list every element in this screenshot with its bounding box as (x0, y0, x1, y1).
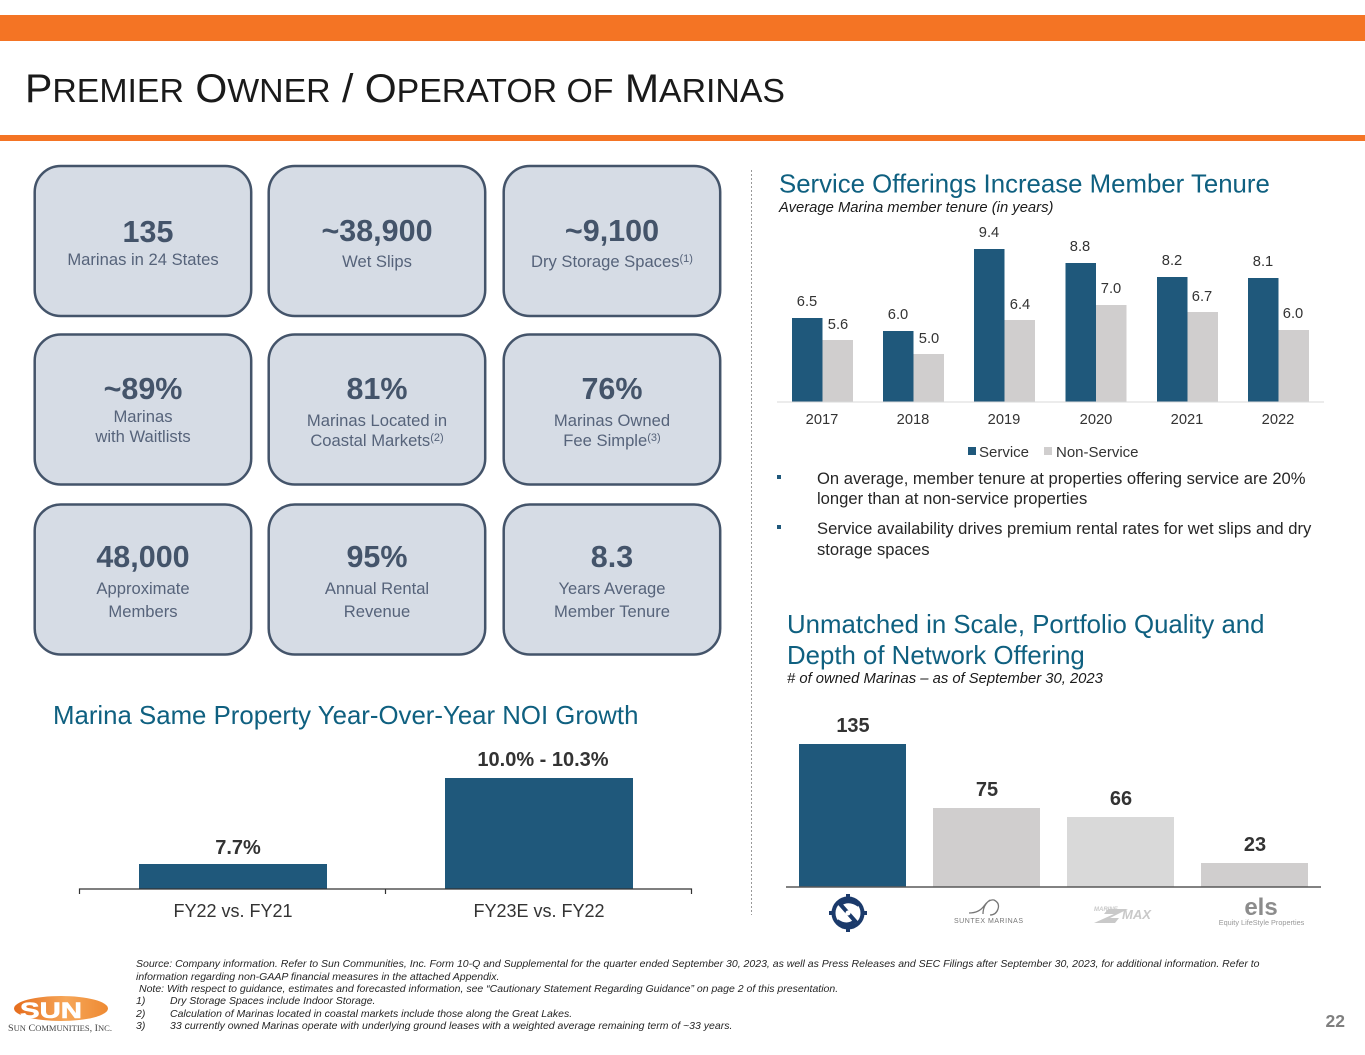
bullet list: storage spaces (817, 540, 930, 559)
heading: unmatched in scale: Depth of Network Offering (787, 642, 1085, 670)
heading: unmatched in scale (787, 611, 1264, 670)
card: fee simple: Marinas Owned (554, 411, 670, 430)
top orange banner (0, 15, 1365, 41)
bullet list: On average, member tenure at properties offering service are 20% (817, 469, 1306, 488)
footnotes: Dry Storage Spaces include Indoor Storage. (170, 995, 375, 1007)
bullet list (777, 469, 1312, 559)
logo: Equity LifeStyle Properties: els (1244, 894, 1278, 921)
bar chart: member tenure: 2020 (1080, 412, 1112, 428)
card: coastal: Marinas Located in (307, 411, 447, 430)
footnotes: 3) (136, 1020, 145, 1032)
card: members: Approximate (96, 579, 190, 598)
card: rental revenue: Annual Rental (325, 579, 429, 598)
bar chart: NOI growth (80, 749, 692, 921)
card: dry storage: (1) (680, 253, 693, 265)
card: rental revenue (269, 504, 485, 654)
title: PREMIER OWNER / OPERATOR OF MARINAS (25, 67, 785, 111)
bar chart: member tenure: 5.6 (828, 317, 848, 333)
bar chart: owned marinas: 75 (976, 779, 998, 801)
bar chart: member tenure: 2018 (897, 412, 929, 428)
bar chart: member tenure: 6.7 (1192, 289, 1212, 305)
bar chart: member tenure: 2019 (988, 412, 1020, 428)
footnotes: Note: With respect to guidance, estimates and forecasted information, see “Cautionary Statement Regarding Guidance” on page 2 of this presentation. (139, 983, 838, 995)
card: tenure: 8.3 (591, 540, 633, 574)
bar chart: member tenure: 6.0 (888, 307, 908, 323)
logo: Equity LifeStyle Properties: Equity LifeStyle Properties (1219, 918, 1305, 927)
card: rental revenue: Revenue (344, 602, 410, 621)
logo: MarineMax: MARINE (1094, 907, 1119, 913)
logo: Equity LifeStyle Properties (1219, 894, 1305, 927)
logo: Sun Communities: SUN COMMUNITIES , INC. (8, 1024, 112, 1034)
card: marinas (35, 166, 251, 316)
footnotes: 1) (136, 995, 145, 1007)
icon: Safe Harbor logo (829, 894, 867, 932)
bar chart: member tenure: 2022 (1262, 412, 1294, 428)
footnotes: Calculation of Marinas located in coastal markets include those along the Great Lakes. (170, 1008, 572, 1020)
heading: service offerings: Service Offerings Increase Member Tenure (779, 170, 1270, 198)
bullet list: longer than at non-service properties (817, 489, 1087, 508)
subheading: owned marinas: # of owned Marinas – as of September 30, 2023 (787, 671, 1104, 687)
card: tenure (504, 504, 720, 654)
heading: NOI growth: Marina Same Property Year-Over-Year NOI Growth (53, 702, 638, 730)
footnotes: Source: Company information. Refer to Sun Communities, Inc. Form 10-Q and Supplemental for the quarter ended September 30, 2023, as well as Press Releases and SEC Filings after September 30, 2023, for additional information. Refer to (136, 958, 1260, 970)
card: dry storage: ~9,100 (565, 214, 659, 248)
bullet list: Service availability drives premium rental rates for wet slips and dry (817, 519, 1312, 538)
bar chart: NOI growth: 10.0% - 10.3% (477, 749, 609, 771)
bar chart: owned marinas (786, 715, 1321, 887)
bar chart: member tenure: 8.1 (1253, 254, 1273, 270)
card: waitlists: ~89% (104, 372, 182, 406)
bar chart: member tenure (777, 225, 1324, 461)
bar chart: member tenure: 5.0 (919, 331, 939, 347)
legend: Non-Service (1056, 444, 1139, 461)
legend (968, 444, 1139, 461)
bar chart: member tenure: 2017 (806, 412, 838, 428)
bar chart: member tenure: 9.4 (979, 225, 999, 241)
logo: MarineMax (1094, 907, 1152, 923)
bar chart: owned marinas: 135 (836, 715, 870, 737)
card: wet slips (269, 166, 485, 316)
card: fee simple (504, 334, 720, 484)
card: coastal (269, 334, 485, 484)
card: fee simple: 76% (581, 372, 643, 406)
card: marinas: Marinas in 24 States (67, 250, 219, 269)
legend: Service (979, 444, 1029, 461)
card: members: Members (108, 602, 178, 621)
card: rental revenue: 95% (346, 540, 408, 574)
card: wet slips: Wet Slips (342, 252, 412, 271)
card: members: 48,000 (96, 540, 190, 574)
card: coastal: 81% (346, 372, 408, 406)
card: members (35, 504, 251, 654)
card: tenure: Years Average (558, 579, 666, 598)
subheading: tenure: Average Marina member tenure (in years) (778, 200, 1053, 216)
card: dry storage (504, 166, 720, 316)
bar chart: member tenure: 2021 (1171, 412, 1203, 428)
bar chart: NOI growth: FY23E vs. FY22 (473, 901, 605, 921)
card: wet slips: ~38,900 (321, 214, 433, 248)
card: tenure: Member Tenure (554, 602, 670, 621)
bar chart: member tenure: 8.2 (1162, 253, 1182, 269)
bar chart: member tenure: 6.0 (1283, 306, 1303, 322)
card: waitlists: Marinas (113, 407, 173, 426)
footnotes: 2) (135, 1008, 145, 1020)
card: coastal: Coastal Markets (310, 431, 430, 450)
panel: stat cards (35, 166, 720, 654)
card: marinas: 135 (123, 215, 173, 249)
bar chart: member tenure: 6.4 (1010, 297, 1030, 313)
card: coastal: (2) (430, 432, 444, 444)
logo: Suntex Marinas (954, 900, 1023, 925)
bar chart: owned marinas: 23 (1244, 834, 1266, 856)
footnotes: 33 currently owned Marinas operate with underlying ground leases with a weighted average remaining term of ~33 years. (170, 1020, 732, 1032)
bar chart: member tenure: 8.8 (1070, 239, 1090, 255)
page number: 22 (1326, 1011, 1345, 1031)
footnotes (135, 958, 1260, 1032)
footnotes: information regarding non-GAAP financial measures in the attached Appendix. (136, 971, 499, 983)
bar chart: member tenure: 7.0 (1101, 281, 1121, 297)
card: dry storage: Dry Storage Spaces (531, 252, 680, 271)
card: waitlists (35, 334, 251, 484)
logo: Sun Communities (8, 996, 112, 1034)
bar chart: NOI growth: FY22 vs. FY21 (173, 901, 293, 921)
bar chart: member tenure: 6.5 (797, 294, 817, 310)
card: fee simple: Fee Simple (563, 431, 647, 450)
card: fee simple: (3) (647, 432, 661, 444)
card: waitlists: with Waitlists (94, 427, 191, 446)
bar chart: NOI growth: 7.7% (215, 837, 261, 859)
heading: unmatched in scale: Unmatched in Scale, Portfolio Quality and (787, 611, 1264, 639)
logo: MarineMax: MAX (1122, 907, 1152, 922)
title underline bar (0, 135, 1365, 141)
logo: Sun Communities: SUN (20, 998, 82, 1023)
logo: Suntex Marinas: SUNTEX MARINAS (954, 918, 1023, 925)
bar chart: owned marinas: 66 (1110, 788, 1132, 810)
